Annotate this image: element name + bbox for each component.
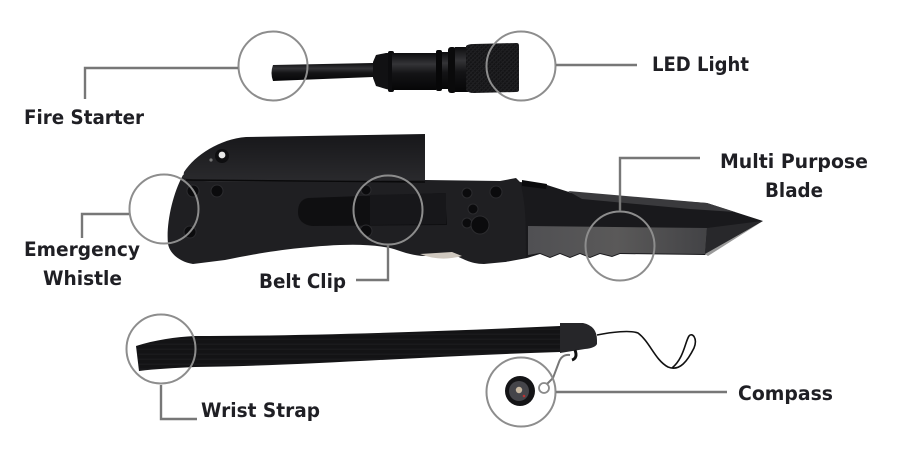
strap band <box>136 326 560 371</box>
thumb stud <box>522 180 547 189</box>
sheath seam <box>186 180 425 182</box>
callout: wrist strap: Wrist Strap <box>201 399 320 422</box>
LED knurled head <box>466 43 519 93</box>
belt clip highlight <box>370 193 446 225</box>
torch body <box>373 47 468 93</box>
wrist strap <box>136 323 695 406</box>
callout: emergency whistle: Whistle <box>43 267 122 290</box>
belt clip <box>298 193 447 226</box>
callout: LED light: LED Light <box>652 53 749 76</box>
chain link <box>547 355 570 384</box>
callout: compass <box>486 358 833 426</box>
callout: fire starter: Fire Starter <box>24 106 144 129</box>
callout: multi purpose blade <box>586 150 868 280</box>
callout: multi purpose blade: Blade <box>765 179 823 202</box>
handle light insert <box>420 252 462 259</box>
cord stem <box>572 350 576 360</box>
sheath top cover <box>183 134 425 182</box>
fire starter and LED light tool <box>272 43 519 93</box>
fire starter rod <box>272 63 373 81</box>
screws <box>184 185 502 238</box>
callout: wrist strap <box>126 314 320 422</box>
knife <box>168 134 763 264</box>
callout: fire starter <box>24 32 308 129</box>
callout: LED light <box>486 32 749 100</box>
handle <box>168 175 526 264</box>
cord loop <box>597 332 695 368</box>
callout: emergency whistle <box>24 174 198 290</box>
lanyard hole <box>209 149 229 163</box>
callout: belt clip <box>259 176 422 293</box>
compass <box>505 376 549 406</box>
callout: multi purpose blade: Multi Purpose <box>720 150 868 173</box>
callout: compass: Compass <box>738 382 833 405</box>
callout: emergency whistle: Emergency <box>24 238 140 261</box>
blade <box>505 182 763 262</box>
strap end cap <box>560 323 597 353</box>
callout: belt clip: Belt Clip <box>259 270 346 293</box>
